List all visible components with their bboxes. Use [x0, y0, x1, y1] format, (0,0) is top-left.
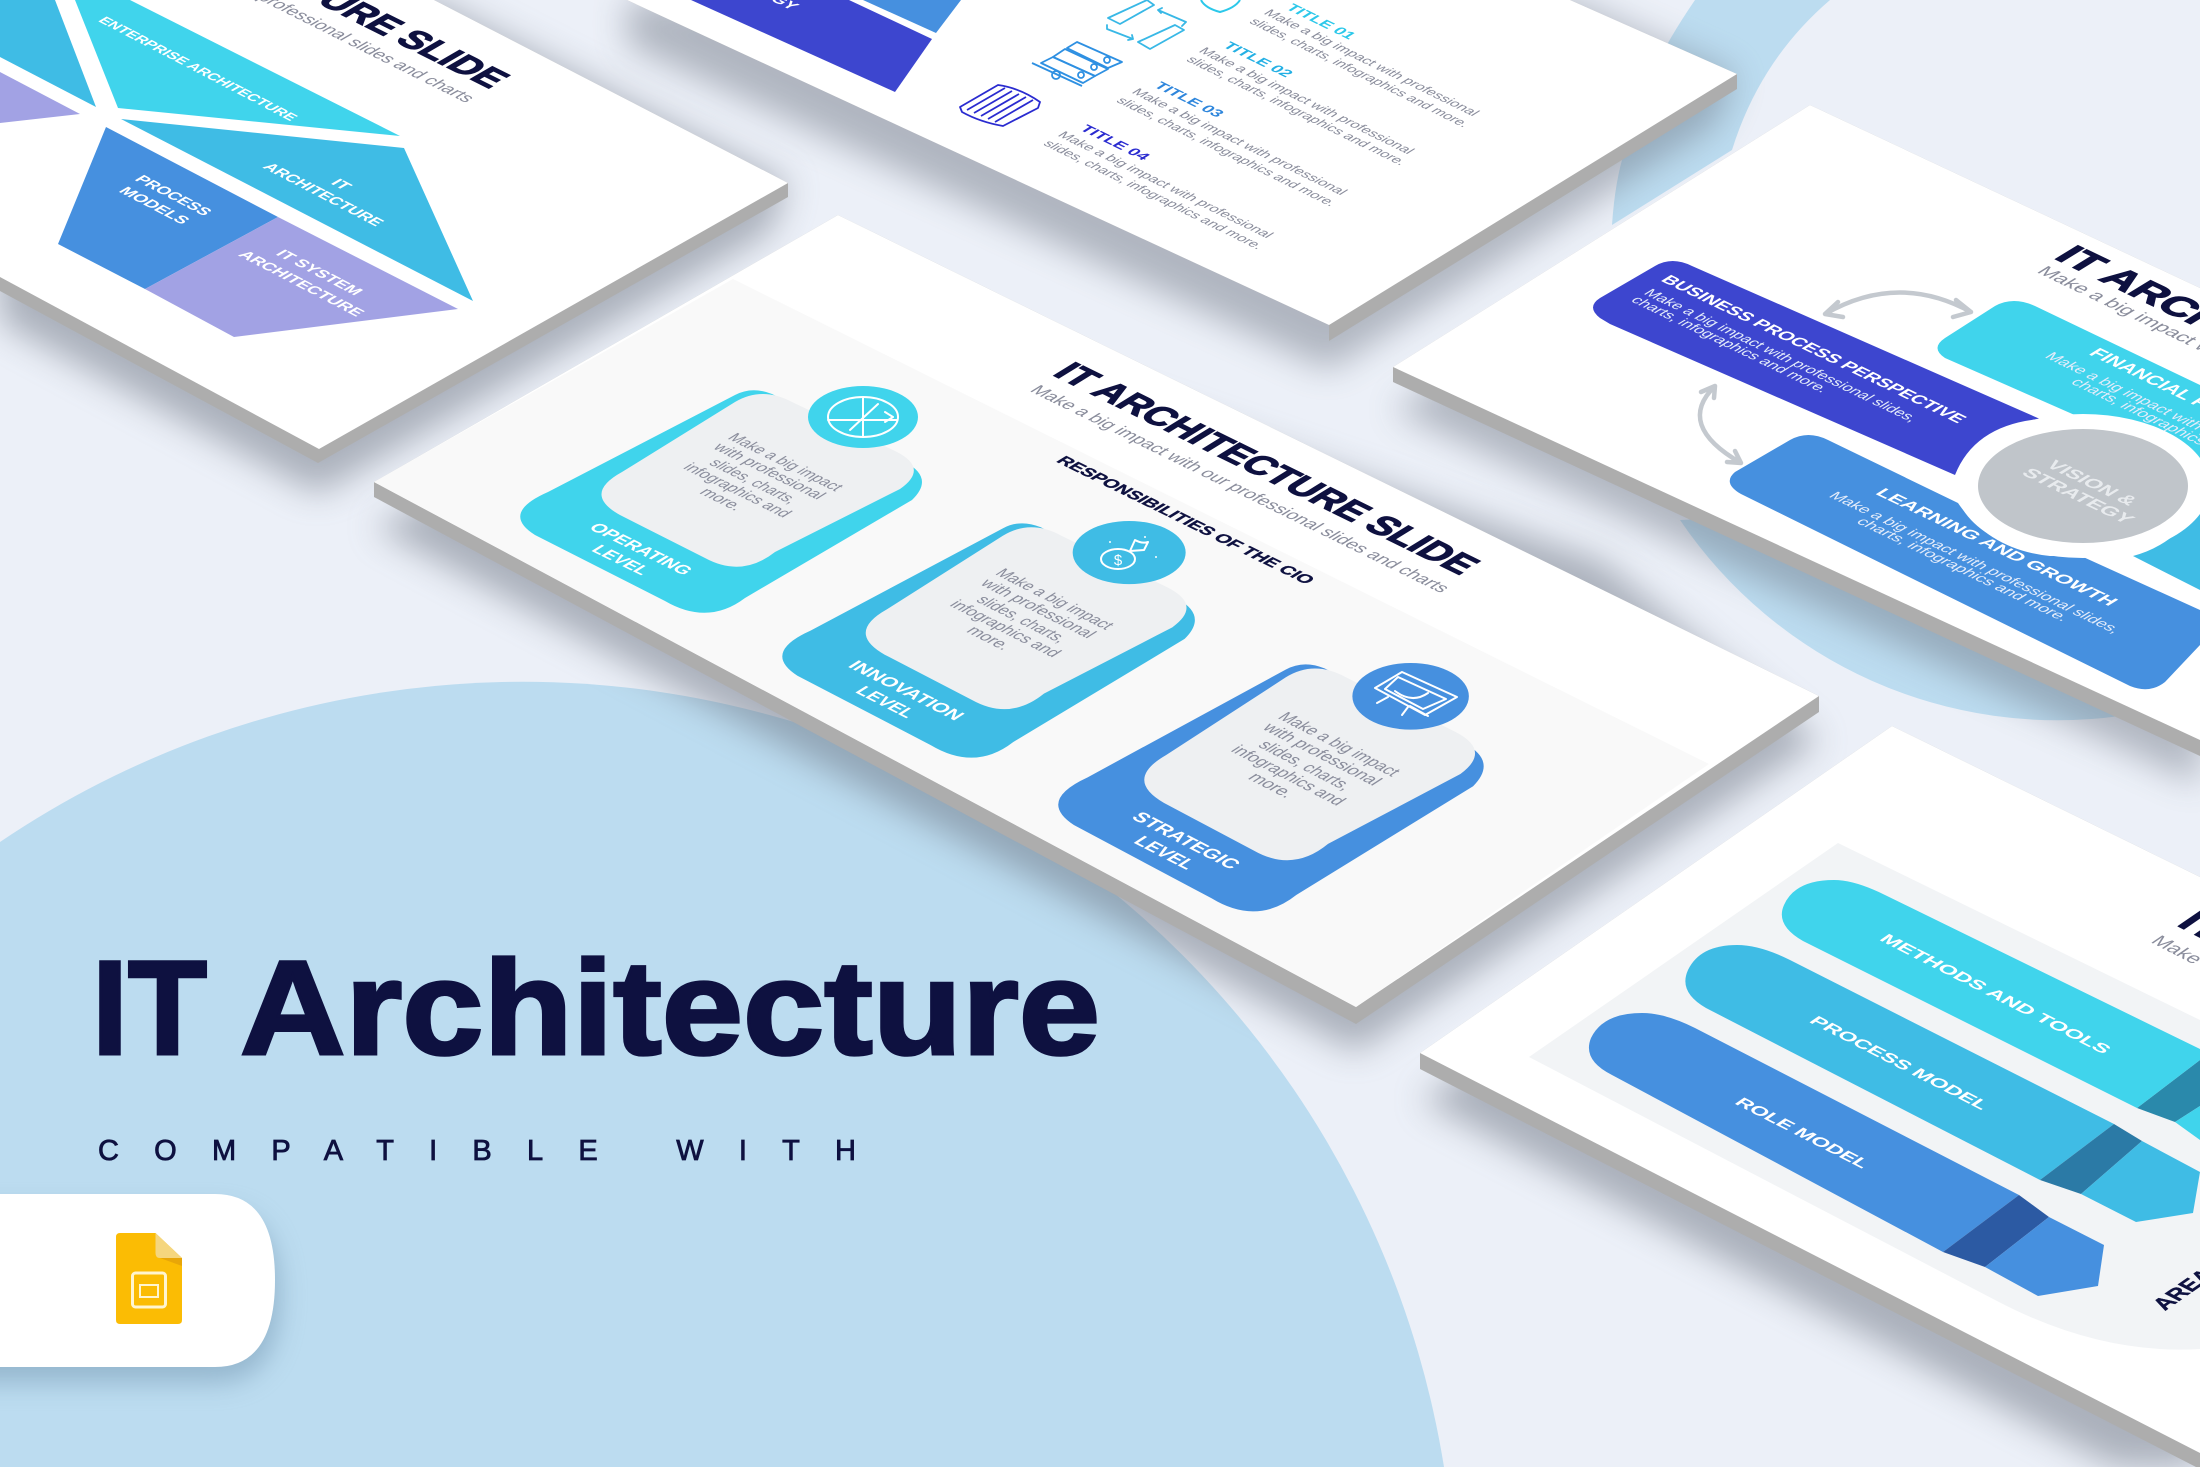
icon: money bag: $ [1114, 552, 1123, 569]
segment: left purple [0, 72, 80, 123]
block: learning and growth [1730, 435, 2200, 689]
card: innovation level: Make a big impact [991, 566, 1119, 632]
list item: title 02: Make a big impact with professional [1195, 46, 1418, 156]
block: learning and growth: charts, infographics and more. [1852, 516, 2073, 624]
card: operating level: slides, charts, [705, 456, 803, 506]
icon: database [960, 85, 1040, 126]
list item: title 03: Make a big impact with professional [1128, 87, 1351, 197]
card: innovation level: LEVEL [850, 684, 920, 721]
slide subtitle: Make a big impact with our professional slides and charts [1025, 382, 1455, 596]
ribbon: role model: ROLE MODEL [1731, 1095, 1874, 1171]
inner panel [374, 279, 1709, 1007]
title: IT [92, 934, 207, 1083]
list item: title 03: TITLE 03 [1150, 80, 1227, 120]
icon: presentation board [1375, 672, 1457, 716]
card: operating level: infographics and [679, 460, 796, 520]
card: strategic level: LEVEL [1129, 834, 1200, 873]
panel: bottom right slide [1420, 726, 2200, 1467]
card: strategic level: STRATEGIC [1127, 809, 1245, 872]
icon: gauge [828, 397, 898, 437]
segment: enterprise architecture [75, 0, 400, 136]
list item: title 04: Make a big impact with professional [1054, 130, 1277, 240]
icon: money bag [1101, 537, 1156, 569]
card: operating level: OPERATING [585, 520, 698, 578]
block: business process perspective [1593, 261, 2040, 475]
card: strategic level [1058, 663, 1484, 911]
vision and strategy circle: STRATEGY [2017, 465, 2140, 526]
inner panel [1529, 843, 2200, 1350]
card: operating level [520, 386, 922, 613]
block: lower right segment [2133, 505, 2200, 590]
segment: upper left [0, 0, 96, 107]
card: strategic level: Make a big impact [1273, 710, 1405, 780]
segment: enterprise architecture: ENTERPRISE ARCHITECTURE [94, 15, 300, 123]
card: operating level: with professional [708, 440, 830, 502]
block: financial perspective [1938, 301, 2200, 495]
list item: title 02: TITLE 02 [1219, 40, 1296, 80]
segment: it system architecture: IT SYSTEM [272, 248, 366, 298]
list item: title 04: TITLE 04 [1076, 123, 1154, 163]
ribbon: role model [1589, 1013, 2104, 1296]
block: business process perspective: Make a big impact with professional slides, [1640, 287, 1922, 424]
list item: title 02: slides, charts, infographics and more. [1182, 54, 1410, 168]
list item: title 04: slides, charts, infographics and more. [1039, 138, 1267, 252]
segment: process models [58, 127, 278, 289]
segment: process models: MODELS [115, 185, 193, 227]
large light-blue circle [0, 682, 1444, 1467]
light-blue crescent, top right [1612, 0, 1830, 225]
subtitle: compatible with: COMPATIBLE WITH [98, 1135, 856, 1167]
pyramid segment: blue [863, 0, 961, 33]
ribbon: methods and tools: METHODS AND TOOLS [1875, 931, 2116, 1057]
vision and strategy circle [1956, 414, 2200, 558]
light-blue arc, right [1680, 500, 2120, 720]
list item: title 03: slides, charts, infographics and more. [1112, 95, 1340, 209]
icon: shield [1201, 0, 1240, 12]
card: operating level: Make a big impact [724, 431, 848, 494]
segment: it architecture: ARCHITECTURE [259, 161, 387, 229]
block: business process perspective: BUSINESS PROCESS PERSPECTIVE [1657, 272, 1971, 426]
card: strategic level: more. [1243, 770, 1299, 801]
arrow: left curved [1700, 386, 1741, 463]
segment: it architecture: IT [327, 177, 355, 192]
card: innovation level: INNOVATION [843, 658, 969, 723]
card: strategic level: with professional [1257, 720, 1386, 789]
segment: it system architecture [145, 217, 458, 337]
panel: right slide [1393, 105, 2200, 785]
icon: server racks [1032, 42, 1122, 86]
card: strategic level: slides, charts, [1253, 738, 1356, 793]
card: innovation level: more. [962, 623, 1017, 653]
block: business process perspective: charts, infographics and more. [1627, 294, 1833, 395]
vision and strategy circle: VISION & [2042, 457, 2143, 508]
card: innovation level: slides, charts, [972, 592, 1073, 645]
list item: title 01: slides, charts, infographics and more. [1245, 16, 1473, 130]
ribbon: process model: PROCESS MODEL [1805, 1014, 1994, 1112]
card: innovation level: infographics and [946, 597, 1066, 660]
pyramid segment: dark blue [691, 0, 932, 92]
card: operating level: LEVEL [587, 542, 655, 578]
icon: server transfer [1107, 0, 1186, 49]
segment: it system architecture: ARCHITECTURE [234, 248, 368, 319]
segment: it architecture [121, 119, 473, 301]
title: Architecture [240, 934, 1100, 1083]
arrow: top curved [1825, 292, 1971, 317]
block: learning and growth: LEARNING AND GROWTH [1871, 486, 2123, 608]
card: innovation level: with professional [976, 575, 1101, 641]
list item: title 01: TITLE 01 [1282, 2, 1360, 42]
list item: title 01: Make a big impact with professional [1260, 8, 1483, 118]
ribbon: methods and tools [1782, 880, 2200, 1140]
ribbon: process model [1685, 945, 2200, 1222]
section heading: RESPONSIBILITIES OF THE CIO [1052, 454, 1319, 587]
panel: main centre slide [374, 215, 1819, 1052]
block: learning and growth: Make a big impact with professional slides, [1825, 490, 2125, 636]
slide title: IT ARCHITECTURE SLIDE [1044, 357, 1488, 580]
card: innovation level [782, 521, 1195, 758]
card: operating level: more. [695, 485, 748, 513]
badge: Google Slides [0, 1194, 280, 1383]
panel: top left slide [0, 0, 788, 494]
panel: top centre slide [627, 0, 1737, 370]
segment: process models: PROCESS [131, 173, 215, 218]
card: strategic level: infographics and [1226, 743, 1350, 809]
icon: slides file [116, 1233, 182, 1324]
